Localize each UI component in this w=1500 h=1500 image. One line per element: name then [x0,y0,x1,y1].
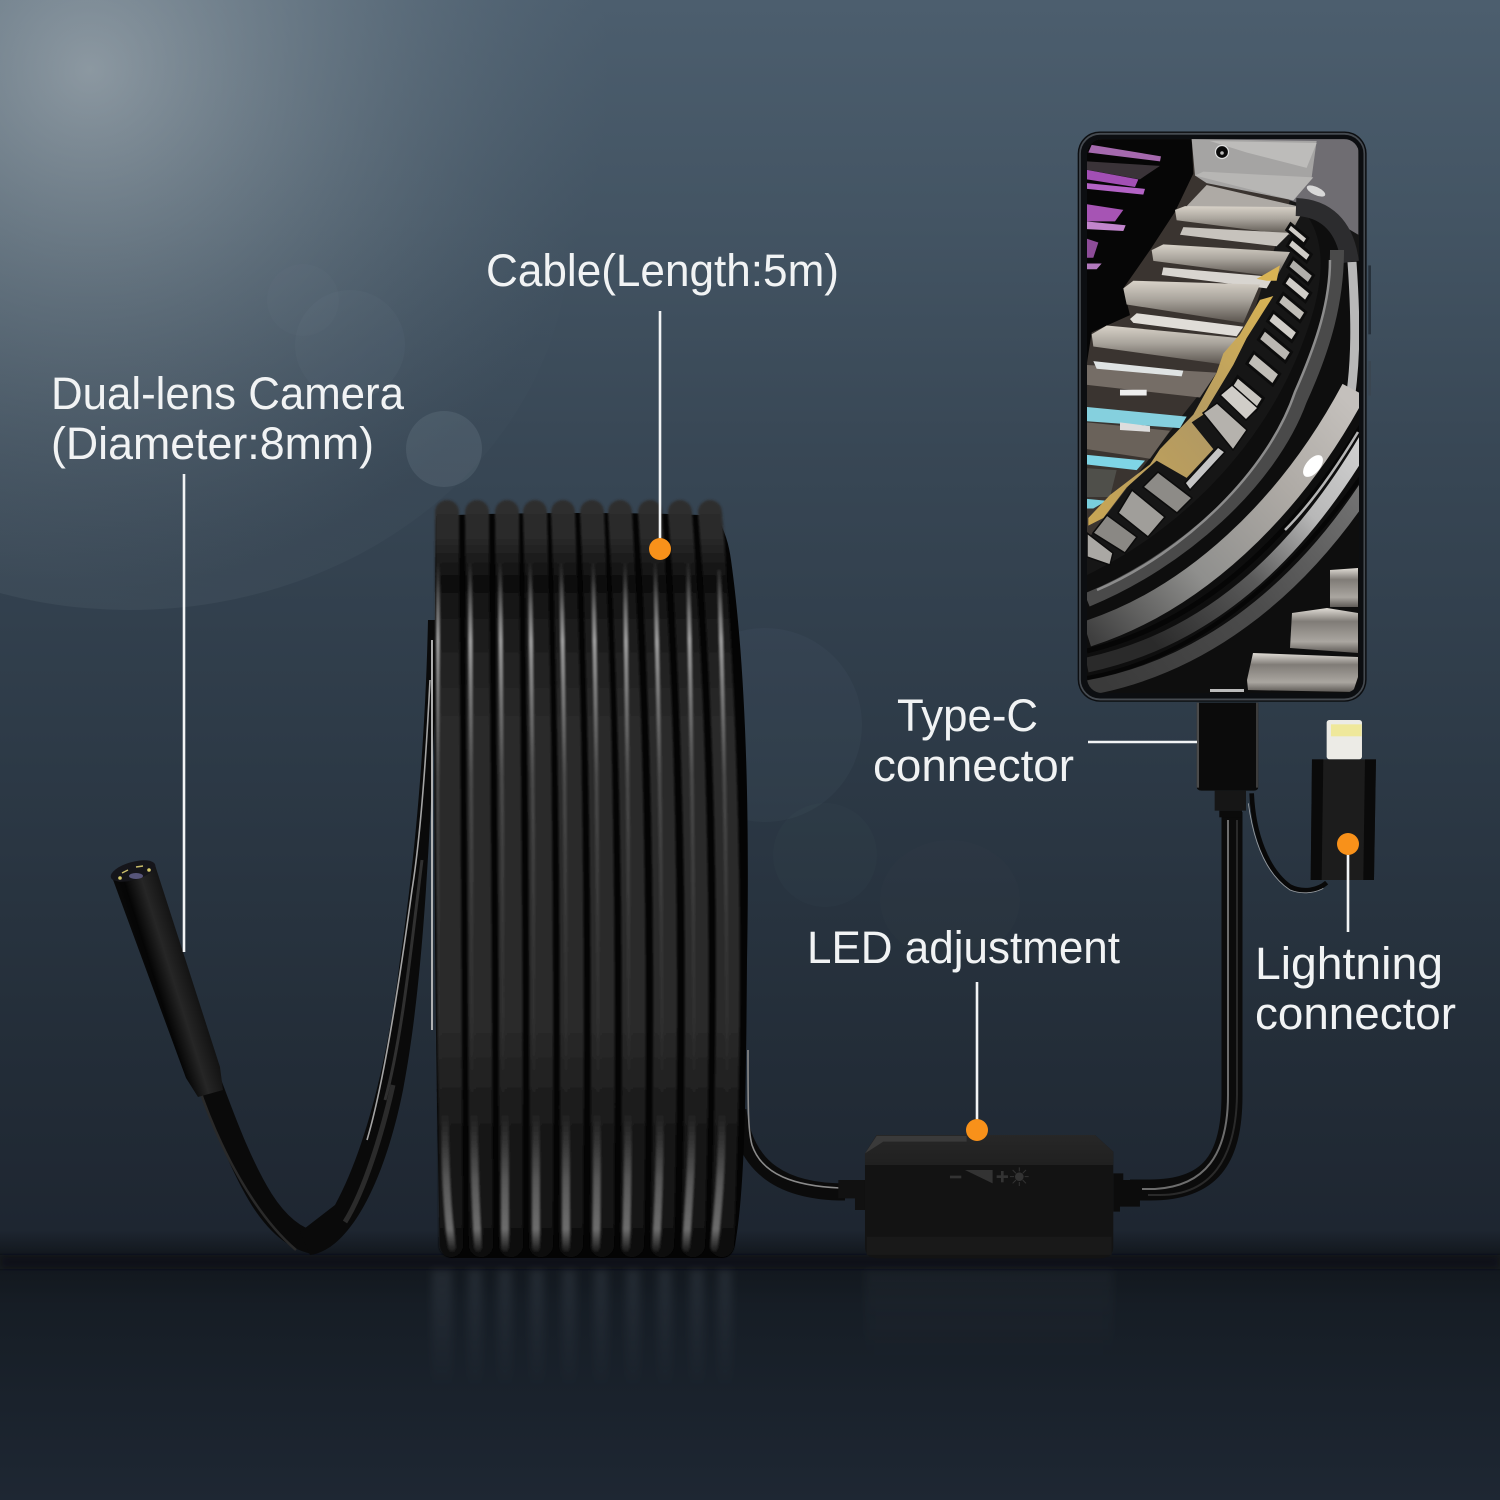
camera probe cable [198,620,438,1255]
label: type-c connector: connector [873,740,1074,791]
label: dual-lens camera: Dual-lens Camera [51,368,405,419]
leader lines [184,311,1348,1130]
label: lightning connector [1255,938,1456,1039]
screen: gold section [1088,224,1314,526]
cable coil [432,512,748,1258]
floor reflection [432,1270,1113,1390]
cable to phone right [1130,812,1237,1195]
screen: ring bands [1087,183,1366,693]
label: lightning connector: Lightning [1255,938,1443,989]
label: LED adjustment: LED adjustment [807,922,1120,973]
label: dual-lens camera: (Diameter:8mm) [51,418,374,469]
marker dot: cable [649,538,671,560]
label: cable length: Cable(Length:5m) [486,245,839,296]
module brightness icons [950,1167,1029,1186]
phone camera hole [1216,146,1228,158]
camera probe head [108,856,223,1097]
Type-C connector and lightning adapter [1197,703,1376,893]
camera lens face [108,856,158,886]
marker dot: LED adjustment [966,1119,988,1141]
screen: purple stripes [1087,145,1161,269]
adapter thin cable [1248,793,1327,893]
screen: lower gear teeth [1087,385,1258,565]
label: lightning connector: connector [1255,988,1456,1039]
label: dual-lens camera [51,368,405,469]
phone [1078,131,1371,702]
screen: large gear teeth [1087,139,1317,508]
lightning plug [1311,720,1376,880]
phone screen: gear close-up [1087,139,1366,693]
cable to LED module left [738,1050,845,1192]
label: type-c connector: Type-C [897,690,1038,741]
type-c plug [1197,703,1258,817]
LED adjustment module [838,1135,1140,1258]
label: type-c connector [873,690,1074,791]
screen: lower-right gear teeth [1247,568,1358,692]
marker dot: lightning connector [1337,833,1359,855]
